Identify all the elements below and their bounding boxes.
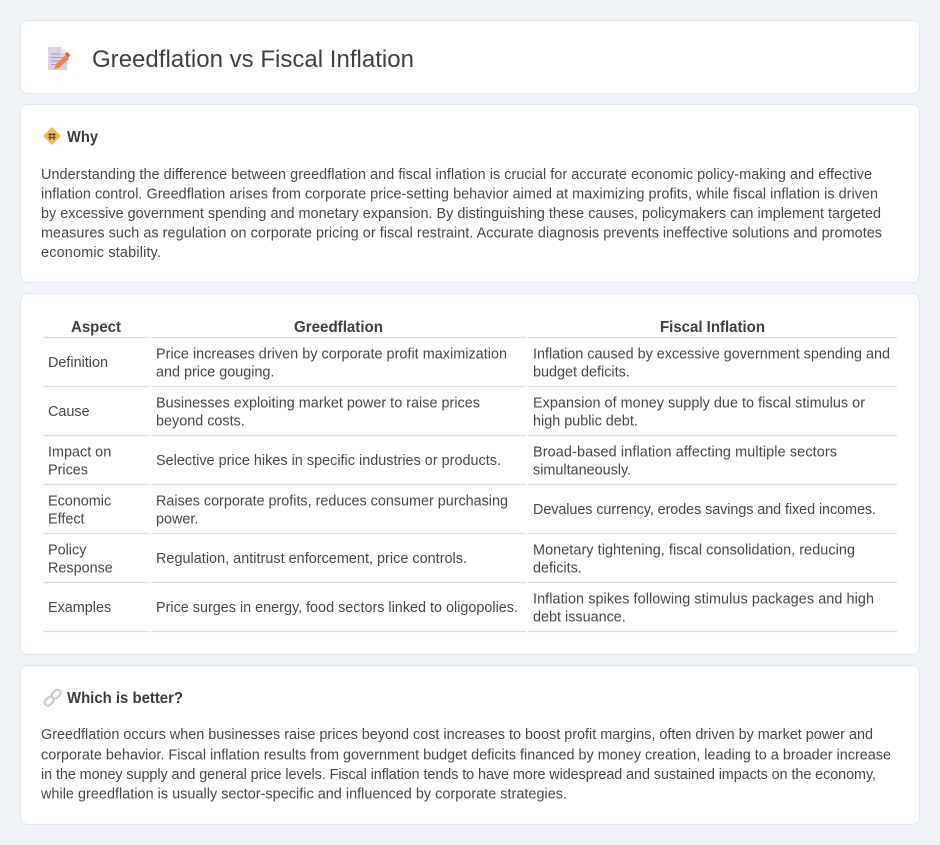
icon: link [43,688,62,707]
row: impact on prices: Broad-based inflation affecting multiple sectors [533,444,837,460]
row: definition: and price gouging. [156,364,274,380]
title: Greedflation vs Fiscal Inflation [92,46,414,73]
text block: which is better paragraph: Greedflation occurs when businesses raise prices beyond cost increases to boost profit margins, often driven by market power and [41,727,873,743]
row: economic effect [48,494,876,528]
row: policy response [48,542,855,576]
text block: why paragraph: by excessive government spending and monetary expansion. By distinguishing these causes, policymakers can implement targeted [41,206,881,222]
row: examples [48,592,874,626]
panel: header card [20,20,920,94]
text block: which is better paragraph: corporate behavior. Fiscal inflation results from government budget deficits financed by money creation, leading to a broader increase [41,748,891,764]
table header row [71,319,765,336]
table header row: Aspect [71,319,121,336]
icon: memo with pencil [48,47,70,70]
text block: why paragraph: Understanding the difference between greedflation and fiscal inflation is crucial for accurate economic policy-making and effective [41,167,872,183]
row: cause: Businesses exploiting market power to raise prices [156,396,480,412]
row: economic effect: Effect [48,512,85,528]
row: examples: Price surges in energy, food sectors linked to oligopolies. [156,600,518,616]
panel: which is better card [20,665,920,825]
row: cause: Cause [48,404,90,420]
table header row: Greedflation [294,319,383,336]
row: definition: Price increases driven by corporate profit maximization [156,346,507,362]
row: impact on prices: Prices [48,462,88,478]
row: definition: Inflation caused by excessive government spending and [533,346,890,362]
row: impact on prices: Selective price hikes in specific industries or products. [156,453,501,469]
row: definition [48,346,890,380]
row: economic effect: Raises corporate profits, reduces consumer purchasing [156,494,508,510]
heading: why: Why [67,129,98,146]
row: cause: Expansion of money supply due to fiscal stimulus or [533,396,865,412]
row: impact on prices: Impact on [48,444,111,460]
text block: why paragraph [41,167,882,261]
text block: why paragraph: measures such as regulation on corporate pricing or fiscal restraint. Accurate diagnosis prevents ineffective solutions and promotes [41,226,882,242]
row: economic effect: power. [156,512,198,528]
text block: which is better paragraph: in the money supply and general price levels. Fiscal inflation tends to have more widespread and sustained impacts on the economy, [41,767,876,783]
row: cause: beyond costs. [156,414,245,430]
row: examples: Inflation spikes following stimulus packages and high [533,592,874,608]
table: comparison [43,319,897,632]
icon: warning diamond [44,128,60,144]
heading: which is better: Which is better? [67,690,183,707]
text block: which is better paragraph [40,727,891,802]
row: policy response: Policy [48,542,87,558]
panel: why card [20,104,920,283]
text block: why paragraph: economic stability. [41,245,161,261]
row: policy response: deficits. [533,560,582,576]
row: policy response: Response [48,560,113,576]
row: examples: Examples [48,600,111,616]
text block: why paragraph: inflation control. Greedflation arises from corporate price-setting behavior aimed at maximizing profits, while fiscal inflation is driven [41,186,878,202]
row: economic effect: Economic [48,494,111,510]
row: policy response: Monetary tightening, fiscal consolidation, reducing [533,542,855,558]
row: economic effect: Devalues currency, erodes savings and fixed incomes. [533,502,876,518]
row: impact on prices [48,444,837,478]
row: examples: debt issuance. [533,610,626,626]
row: definition: budget deficits. [533,364,630,380]
row: definition: Definition [48,355,108,371]
panel: comparison table card [20,293,920,655]
row: cause: high public debt. [533,414,638,430]
row: impact on prices: simultaneously. [533,462,631,478]
text block: which is better paragraph: while greedflation is usually sector-specific and influenced by corporate strategies. [40,786,567,802]
row: policy response: Regulation, antitrust enforcement, price controls. [156,551,467,567]
row: cause [48,396,865,430]
table header row: Fiscal Inflation [660,319,765,336]
